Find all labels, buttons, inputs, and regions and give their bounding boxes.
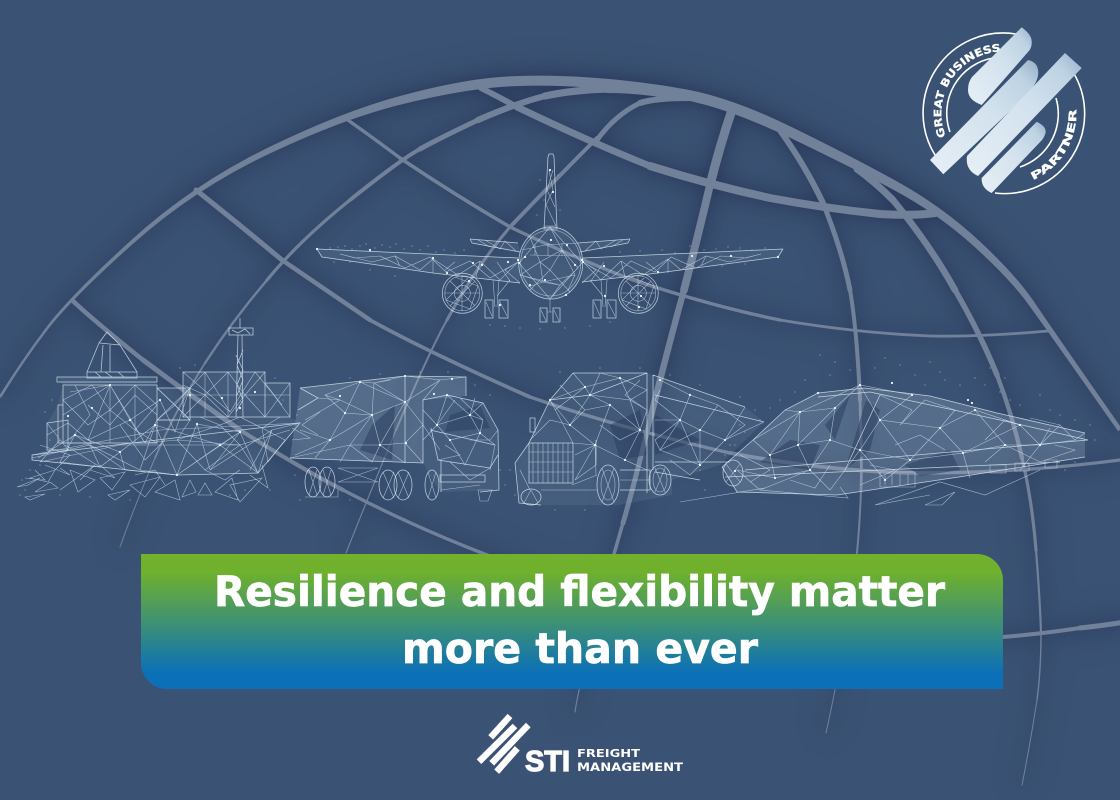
icon: wireframe airplane bbox=[317, 154, 783, 329]
headline line 2: more than ever bbox=[402, 624, 758, 673]
headline line 1: Resilience and flexibility matter bbox=[214, 567, 945, 616]
logo text management: MANAGEMENT bbox=[577, 760, 683, 774]
badge stripes bbox=[930, 27, 1082, 193]
banner: headline bbox=[141, 554, 1003, 689]
banner background bbox=[141, 554, 1003, 689]
icon: wireframe container ship bbox=[17, 318, 300, 502]
badge: Great Business Partner bbox=[922, 27, 1086, 194]
icon: wireframe high-speed train bbox=[680, 355, 1095, 505]
icon: wireframe semi truck bbox=[505, 368, 764, 510]
icon: wireframe box truck bbox=[290, 372, 500, 501]
badge text: great business: GREAT BUSINESS bbox=[934, 44, 1000, 138]
logo: STI Freight Management bbox=[479, 716, 683, 778]
logo wordmark STI: STI bbox=[525, 746, 570, 778]
badge text: partner: PARTNER bbox=[1030, 109, 1077, 180]
logo text freight: FREIGHT bbox=[577, 747, 641, 760]
logo icon stripes bbox=[479, 716, 528, 772]
